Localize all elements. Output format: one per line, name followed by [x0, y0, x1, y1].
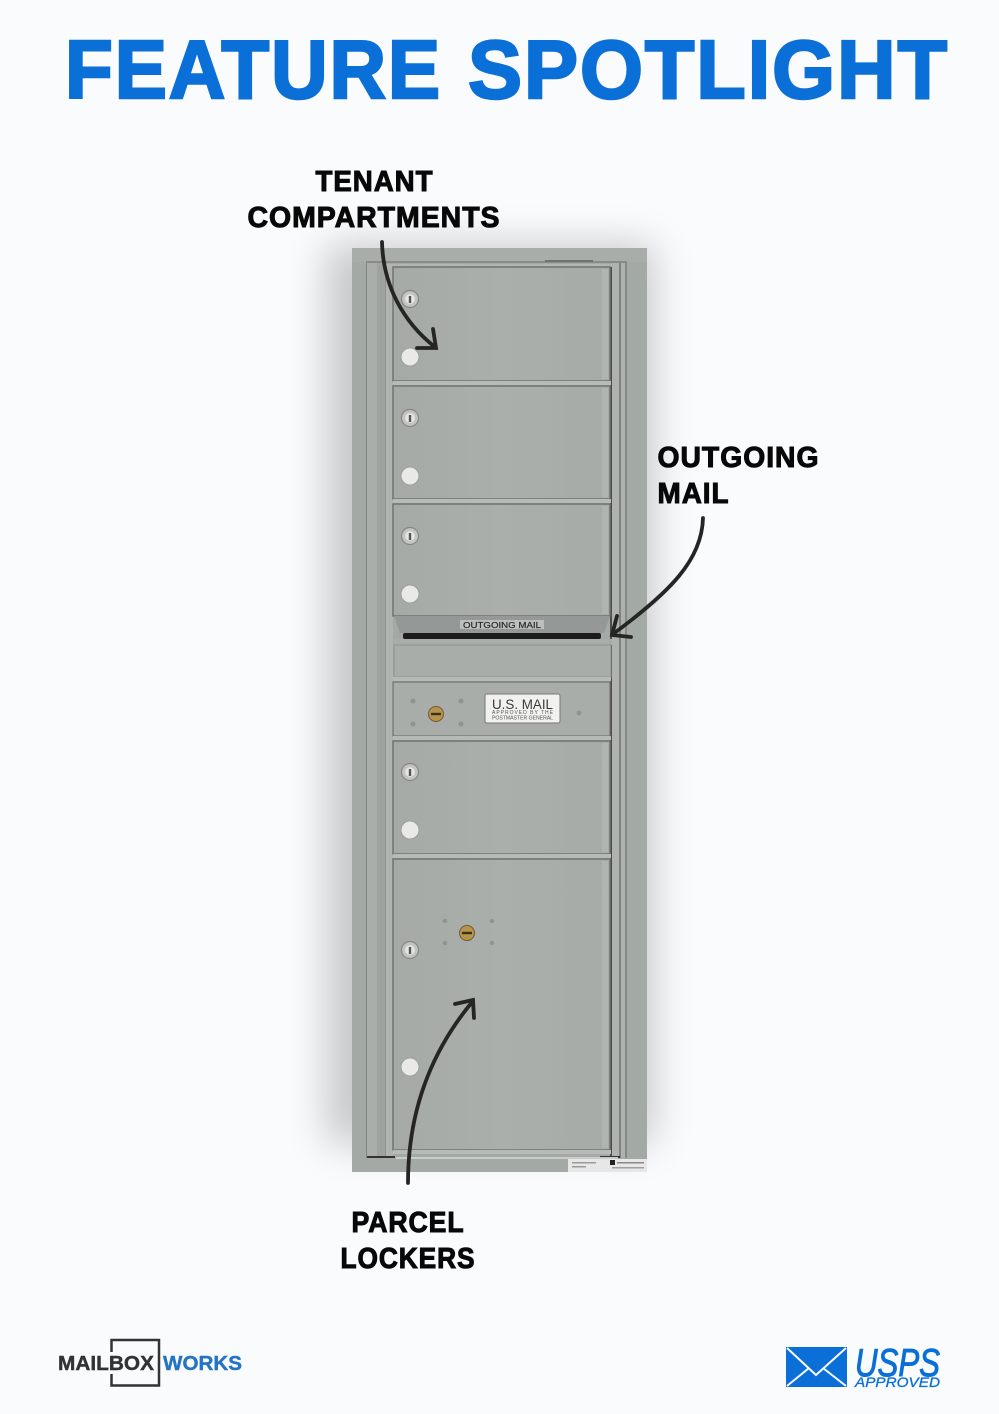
label: parcel lockers: LOCKERS — [340, 1243, 476, 1275]
logo: Mailbox Works: MAILBOX — [58, 1353, 155, 1375]
cast shadow — [326, 244, 654, 1144]
outer frame — [352, 248, 647, 1172]
label: outgoing mail — [658, 442, 820, 510]
logo: USPS approved — [786, 1342, 940, 1390]
logo: USPS approved: APPROVED — [854, 1374, 940, 1390]
serial label — [568, 1159, 647, 1172]
frame rails — [366, 260, 627, 1159]
mailbox unit — [326, 244, 654, 1172]
tenant door 1 — [393, 267, 611, 385]
icon: envelope — [786, 1347, 847, 1387]
arrow: parcel lockers — [408, 1000, 474, 1183]
title: FEATURE — [65, 23, 442, 116]
U.S. Mail plate — [485, 694, 560, 723]
tenant door 3 — [393, 504, 610, 616]
tenant door 2 — [393, 386, 611, 503]
U.S. Mail plate: APPROVED BY THE — [492, 710, 554, 716]
logo square — [112, 1340, 159, 1386]
label: tenant compartments: TENANT — [316, 166, 434, 198]
label: outgoing mail: OUTGOING — [658, 442, 820, 474]
label: parcel lockers: PARCEL — [352, 1207, 464, 1239]
parcel locker door — [393, 859, 611, 1154]
master panel — [393, 682, 611, 740]
outgoing mail slot — [393, 616, 612, 681]
U.S. Mail plate: POSTMASTER GENERAL — [492, 716, 553, 722]
label: outgoing mail: MAIL — [658, 478, 730, 510]
label: parcel lockers — [340, 1207, 476, 1275]
label: tenant compartments: COMPARTMENTS — [248, 202, 500, 234]
outgoing mail slot: OUTGOING MAIL — [463, 621, 542, 630]
arrow: outgoing mail — [612, 518, 703, 637]
logo: USPS approved: USPS — [855, 1342, 940, 1385]
label: tenant compartments — [248, 166, 500, 234]
logo: Mailbox Works: WORKS — [163, 1353, 242, 1375]
title — [65, 23, 949, 116]
logo: Mailbox Works — [58, 1340, 242, 1386]
arrow: tenant compartments — [382, 242, 436, 348]
title: SPOTLIGHT — [468, 23, 949, 116]
U.S. Mail plate: U.S. MAIL — [492, 696, 553, 712]
tenant door 4 — [393, 741, 611, 858]
